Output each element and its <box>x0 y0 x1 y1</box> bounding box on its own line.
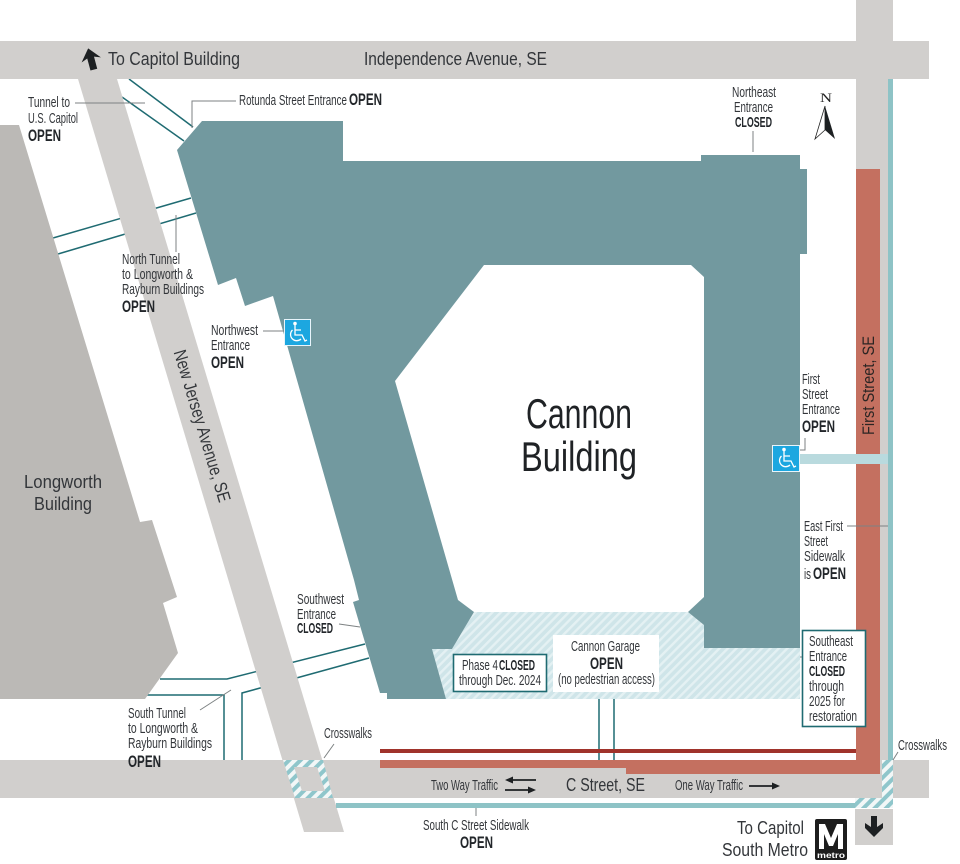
callout: Southeast Entrance: CLOSED <box>809 663 845 680</box>
road: Independence Avenue <box>0 41 929 79</box>
icon: metro logo: metro <box>817 851 845 860</box>
label: Tunnel to U.S. Capitol <box>28 95 78 145</box>
label: Northwest Entrance: Entrance <box>211 338 250 354</box>
label: North Tunnel: North Tunnel <box>122 252 180 268</box>
callout: Cannon Garage: (no pedestrian access) <box>558 672 655 688</box>
label: First Street Entrance <box>802 372 840 436</box>
callout: Phase 4 closed: Phase 4 <box>462 658 498 674</box>
East First Street closed red band <box>380 169 880 774</box>
title: Cannon Building: Building <box>521 433 637 480</box>
First Street entrance walkway <box>800 454 888 464</box>
label: South C Street Sidewalk <box>423 818 530 852</box>
callout: Cannon Garage: Cannon Garage <box>571 639 640 655</box>
callout: Southeast Entrance: Entrance <box>809 649 847 665</box>
label: New Jersey Avenue: New Jersey Avenue, SE <box>170 347 234 504</box>
label: C Street: C Street, SE <box>566 775 645 795</box>
title: Cannon Building <box>521 390 637 480</box>
label: Southwest Entrance: CLOSED <box>297 620 333 637</box>
label: Crosswalks west: Crosswalks <box>324 726 372 742</box>
label: South C Street Sidewalk: OPEN <box>460 833 493 852</box>
label: To Capitol Building: To Capitol Building <box>108 49 240 69</box>
callout: Southeast Entrance: restoration <box>809 709 857 725</box>
label: To Capitol South Metro: South Metro <box>722 840 808 860</box>
C Street dark red line <box>380 749 856 753</box>
label: East First Street Sidewalk: is <box>804 567 811 583</box>
label: South C Street Sidewalk: South C Street Sidewalk <box>423 818 530 834</box>
label: North Tunnel: OPEN <box>122 297 155 316</box>
label: Northeast Entrance: CLOSED <box>735 114 772 131</box>
crosswalk: New Jersey Avenue <box>283 760 333 798</box>
label: Southwest Entrance <box>297 592 344 637</box>
label: To Capitol South Metro <box>722 818 808 860</box>
icon: accessible entrance northwest <box>284 320 310 346</box>
label: Two Way Traffic: Two Way Traffic <box>431 778 498 794</box>
First Street sidewalk <box>888 79 893 760</box>
callout: Cannon Garage: OPEN <box>590 654 623 673</box>
label: Tunnel to U.S. Capitol: U.S. Capitol <box>28 111 78 127</box>
title: Cannon Building: Cannon <box>526 390 632 437</box>
callout: Southeast Entrance: 2025 for <box>809 694 845 710</box>
label: Independence Avenue: Independence Avenue, SE <box>364 49 547 69</box>
label: Northwest Entrance <box>211 323 258 372</box>
callout: Cannon Garage <box>553 635 659 692</box>
label: South Tunnel: to Longworth & <box>128 721 198 737</box>
callout: Southeast Entrance <box>802 630 866 726</box>
callout: Phase 4 closed: through Dec. 2024 <box>459 673 541 689</box>
label: East First Street Sidewalk: Street <box>804 534 828 550</box>
icon: north arrow: N <box>820 90 833 105</box>
label: Northeast Entrance: Northeast <box>732 85 776 101</box>
label: East First Street Sidewalk <box>804 519 846 583</box>
label: South Tunnel: South Tunnel <box>128 706 186 722</box>
label: South Tunnel <box>128 706 212 771</box>
label: Northeast Entrance <box>732 85 776 131</box>
label: Northwest Entrance: Northwest <box>211 323 258 339</box>
label: Longworth Building: Longworth <box>24 472 102 492</box>
label: First Street Entrance: Street <box>802 387 828 403</box>
icon: arrow down <box>865 816 883 837</box>
crosswalk: First and C <box>855 760 893 808</box>
arrow: to Capitol <box>78 46 104 72</box>
label: First Street Entrance: Entrance <box>802 402 840 418</box>
label: First Street Entrance: OPEN <box>802 417 835 436</box>
label: First Street Entrance: First <box>802 372 820 388</box>
label: One Way Traffic: One Way Traffic <box>675 778 743 794</box>
leader lines <box>75 101 898 816</box>
label: Longworth Building <box>24 472 102 514</box>
label: South Tunnel: Rayburn Buildings <box>128 736 212 752</box>
label: East First Street Sidewalk: OPEN <box>813 564 846 583</box>
road: block to metro <box>855 809 893 845</box>
label: South Tunnel: OPEN <box>128 752 161 771</box>
label: To Capitol South Metro: To Capitol <box>737 818 804 838</box>
garage hatched area <box>432 612 800 699</box>
label: East First Street Sidewalk: East First <box>804 519 843 535</box>
icon: two way arrows <box>505 776 536 794</box>
tunnel lines <box>53 79 614 760</box>
callout: Phase 4 closed: CLOSED <box>499 657 535 674</box>
icon: accessible entrance First Street <box>772 446 800 472</box>
callout: Southeast Entrance: Southeast <box>809 634 853 650</box>
icon: north arrow <box>815 90 835 139</box>
road: New Jersey Avenue <box>78 79 344 832</box>
label: Tunnel to U.S. Capitol: Tunnel to <box>28 95 70 111</box>
icon: metro logo <box>815 819 847 860</box>
label: Southwest Entrance: Southwest <box>297 592 344 608</box>
label: North Tunnel <box>122 252 204 316</box>
label: Rotunda Street Entrance: Rotunda Street Entrance <box>239 93 347 109</box>
label: First Street: First Street, SE <box>859 336 878 435</box>
road: First Street <box>856 0 893 798</box>
label: Rotunda Street Entrance: OPEN <box>349 90 382 109</box>
label: Tunnel to U.S. Capitol: OPEN <box>28 126 61 145</box>
label: Longworth Building: Building <box>34 494 92 514</box>
callout: Phase 4 closed <box>454 654 546 692</box>
label: Northwest Entrance: OPEN <box>211 353 244 372</box>
label: North Tunnel: to Longworth & <box>122 267 193 283</box>
label: Northeast Entrance: Entrance <box>734 100 773 116</box>
road: C Street <box>0 760 929 798</box>
South C Street sidewalk <box>336 803 855 808</box>
callout: Southeast Entrance: through <box>809 679 844 695</box>
label: North Tunnel: Rayburn Buildings <box>122 282 204 298</box>
label: Southwest Entrance: Entrance <box>297 607 336 623</box>
Longworth Building <box>0 125 178 699</box>
Cannon Building footprint <box>177 121 807 699</box>
label: East First Street Sidewalk: Sidewalk <box>804 549 846 565</box>
icon: one way arrow <box>749 782 780 790</box>
